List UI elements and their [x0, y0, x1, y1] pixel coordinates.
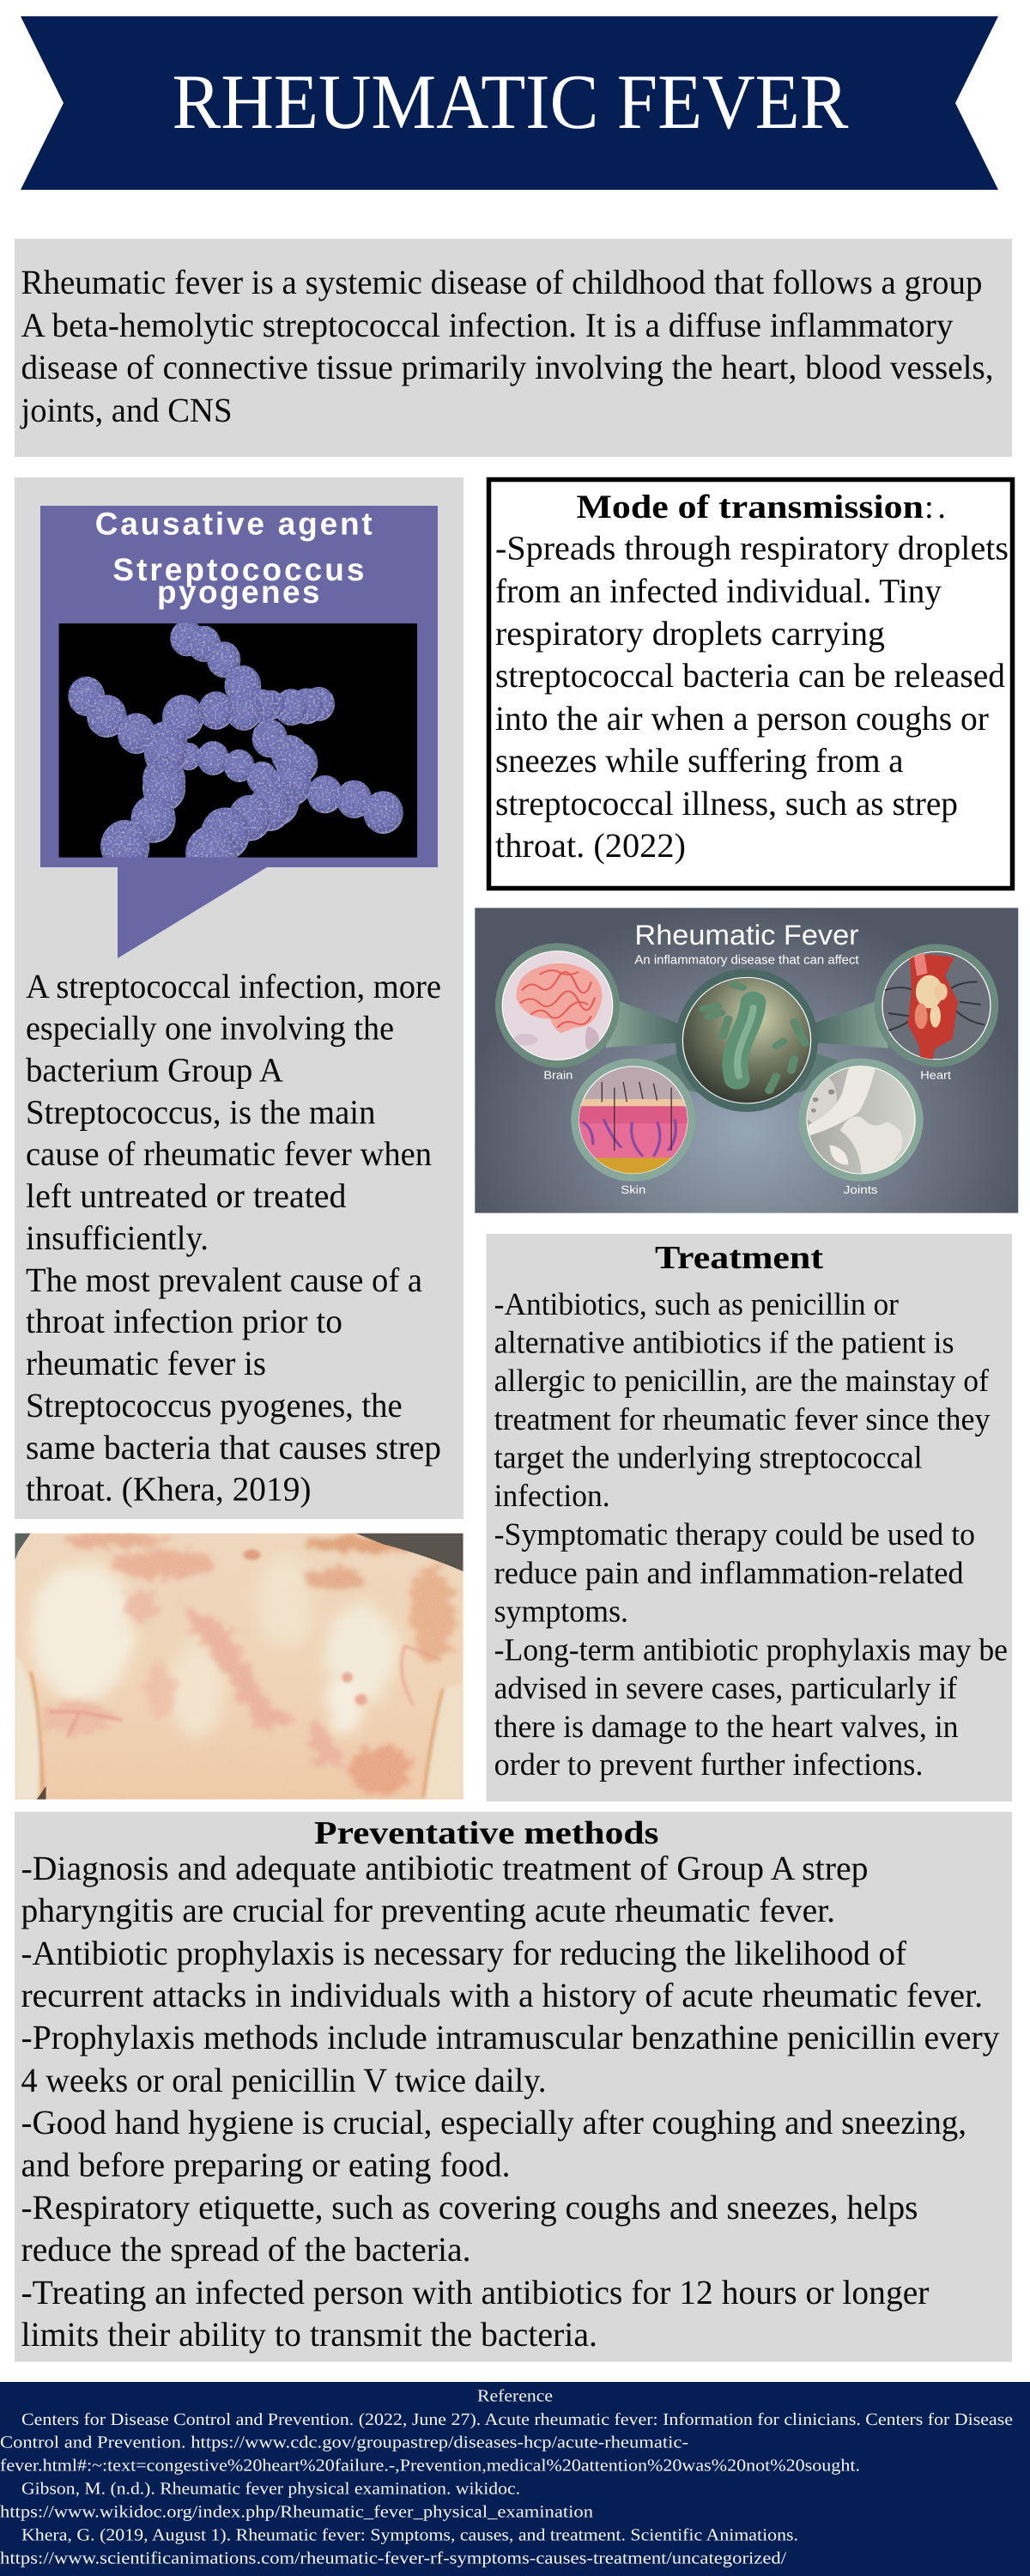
text block: cause of rheumatic fever: rheumatic fever is [26, 1344, 266, 1382]
text block: treatment: treatment for rheumatic fever since they [494, 1402, 991, 1437]
heading: streptococcus pyogenes: pyogenes [157, 574, 319, 610]
text block: transmission: streptococcal bacteria can be released [495, 656, 1005, 695]
text block: transmission: -Spreads through respiratory droplets [495, 529, 1009, 568]
text block: preventative methods: reduce the spread of the bacteria. [21, 2230, 470, 2269]
text block: preventative methods [21, 1849, 999, 2354]
panel: introduction: A beta-hemolytic streptococcal infection. It is a diffuse inflammatory [21, 306, 953, 344]
heading: treatment: Treatment [655, 1240, 823, 1276]
text block: cause of rheumatic fever: throat infection prior to [26, 1302, 342, 1340]
text block: treatment: infection. [494, 1479, 610, 1514]
text block: preventative methods: -Good hand hygiene is crucial, especially after coughing and sneezing, [21, 2103, 966, 2142]
text block: treatment [494, 1287, 1008, 1783]
circle: skin: Skin [621, 1183, 645, 1196]
text block: cause of rheumatic fever [26, 967, 441, 1508]
text block: transmission: throat. (2022) [495, 826, 686, 865]
text block: preventative methods: -Respiratory etiquette, such as covering coughs and sneezes, helps [21, 2188, 918, 2227]
text block: treatment: advised in severe cases, particularly if [494, 1671, 958, 1706]
text block: transmission: streptococcal illness, such as strep [495, 784, 958, 823]
text block: treatment: allergic to penicillin, are the mainstay of [494, 1364, 990, 1399]
text block: preventative methods: and before preparing or eating food. [21, 2145, 510, 2184]
text block: treatment: reduce pain and inflammation-related [494, 1556, 964, 1591]
text block: reference list: https://www.wikidoc.org/index.php/Rheumatic_fever_physical_examination [0, 2503, 593, 2522]
text block: treatment: -Antibiotics, such as penicillin or [494, 1287, 899, 1322]
text block: reference list: Khera, G. (2019, August 1). Rheumatic fever: Symptoms, causes, and treatment. Scientific Animations. [21, 2526, 798, 2545]
text block: cause of rheumatic fever: The most prevalent cause of a [26, 1261, 422, 1299]
panel: treatment [486, 1234, 1012, 1801]
text block: transmission: from an infected individual. Tiny [495, 572, 942, 611]
text block: reference list: fever.html#:~:text=congestive%20heart%20failure.-,Prevention,medical%20attention%20was%20not%20sought. [0, 2457, 860, 2476]
text block: transmission [495, 529, 1009, 865]
heading: preventative methods: Preventative methods [314, 1815, 659, 1851]
image heading: Rheumatic Fever [634, 919, 859, 951]
heading: mode of transmission: Mode of transmission [577, 489, 924, 526]
circle: skin [571, 1059, 695, 1196]
panel: references [0, 2382, 1030, 2576]
text block: cause of rheumatic fever: especially one involving the [26, 1009, 394, 1048]
text block: treatment: there is damage to the heart valves, in [494, 1710, 959, 1745]
panel: introduction [15, 239, 1012, 457]
text block: cause of rheumatic fever: Streptococcus, is the main [26, 1093, 376, 1132]
title: RHEUMATIC FEVER [172, 58, 849, 145]
text block: treatment: alternative antibiotics if the patient is [494, 1326, 954, 1361]
text block: cause of rheumatic fever: insufficiently. [26, 1218, 209, 1257]
callout: causative agent [40, 506, 438, 958]
text block: cause of rheumatic fever: bacterium Group A [26, 1051, 283, 1090]
text block: preventative methods: -Diagnosis and adequate antibiotic treatment of Group A strep [21, 1849, 869, 1887]
image: rheumatic fever affected organs diagram [475, 908, 1018, 1213]
text block: reference list [0, 2410, 1013, 2567]
panel: introduction: joints, and CNS [20, 391, 232, 429]
circle: brain [495, 943, 620, 1082]
image heading: An inflammatory disease that can affect [634, 952, 859, 967]
text block: treatment: order to prevent further infections. [494, 1747, 923, 1783]
panel: mode of transmission [489, 479, 1013, 888]
text block: reference list: Control and Prevention. https://www.cdc.gov/groupastrep/diseases-hcp/acute-rheumatic- [0, 2433, 688, 2452]
text block: treatment: -Symptomatic therapy could be used to [494, 1517, 975, 1552]
text block: cause of rheumatic fever: left untreated or treated [26, 1176, 347, 1215]
text block: cause of rheumatic fever: throat. (Khera, 2019) [26, 1470, 311, 1508]
text block: preventative methods: limits their ability to transmit the bacteria. [21, 2315, 597, 2354]
text block: cause of rheumatic fever: A streptococcal infection, more [26, 967, 441, 1005]
text block: reference list: Centers for Disease Control and Prevention. (2022, June 27). Acute rheumatic fever: Information for clinicians. Centers for Disease [21, 2410, 1013, 2429]
image heading [634, 919, 859, 967]
circle: heart: Heart [920, 1069, 951, 1082]
photo: rheumatic fever rash on back [15, 1531, 464, 1800]
text block: transmission: sneezes while suffering from a [495, 741, 904, 780]
circle: bacterium [676, 969, 818, 1112]
heading: streptococcus pyogenes [112, 552, 364, 610]
heading: streptococcus pyogenes: Streptococcus [112, 552, 364, 587]
text block: reference list: Gibson, M. (n.d.). Rheumatic fever physical examination. wikidoc. [21, 2480, 520, 2499]
text block: preventative methods: -Treating an infected person with antibiotics for 12 hours or longer [21, 2273, 929, 2312]
text block: treatment: target the underlying streptococcal [494, 1441, 923, 1475]
heading: mode of transmission: : . [924, 489, 946, 526]
text block: treatment: -Long-term antibiotic prophylaxis may be [494, 1633, 1008, 1668]
panel: preventative methods [15, 1812, 1012, 2361]
text block: transmission: into the air when a person coughs or [495, 699, 989, 738]
text block: preventative methods: -Prophylaxis methods include intramuscular benzathine penicillin every [21, 2018, 999, 2057]
text block: treatment: symptoms. [494, 1595, 628, 1630]
text block: cause of rheumatic fever: cause of rheumatic fever when [26, 1134, 432, 1173]
circle: joints: Joints [844, 1183, 878, 1196]
panel: introduction: disease of connective tissue primarily involving the heart, blood vessels, [21, 348, 994, 386]
heading: causative agent: Causative agent [95, 507, 373, 542]
text block: preventative methods: 4 weeks or oral penicillin V twice daily. [21, 2061, 546, 2099]
image: streptococcus bacteria chains [58, 623, 417, 858]
text block: cause of rheumatic fever: Streptococcus pyogenes, the [26, 1386, 403, 1425]
panel: introduction: Rheumatic fever is a systemic disease of childhood that follows a group [21, 263, 982, 301]
title banner [21, 16, 998, 190]
circle: joints [799, 1059, 924, 1196]
text block: preventative methods: pharyngitis are crucial for preventing acute rheumatic fever. [21, 1891, 835, 1929]
heading: reference: Reference [477, 2387, 553, 2406]
text block: reference list: https://www.scientificanimations.com/rheumatic-fever-rf-symptoms-causes-treatment/uncategorized/ [0, 2549, 786, 2567]
circle: heart [874, 944, 998, 1082]
text block: preventative methods: recurrent attacks in individuals with a history of acute rheumatic fever. [21, 1976, 983, 2014]
text block: cause of rheumatic fever: same bacteria that causes strep [26, 1428, 441, 1467]
text block: transmission: respiratory droplets carrying [495, 614, 885, 653]
panel: causative agent and cause text [15, 477, 464, 1519]
circle: brain: Brain [543, 1069, 573, 1082]
text block: preventative methods: -Antibiotic prophylaxis is necessary for reducing the likelihood of [21, 1934, 907, 1972]
